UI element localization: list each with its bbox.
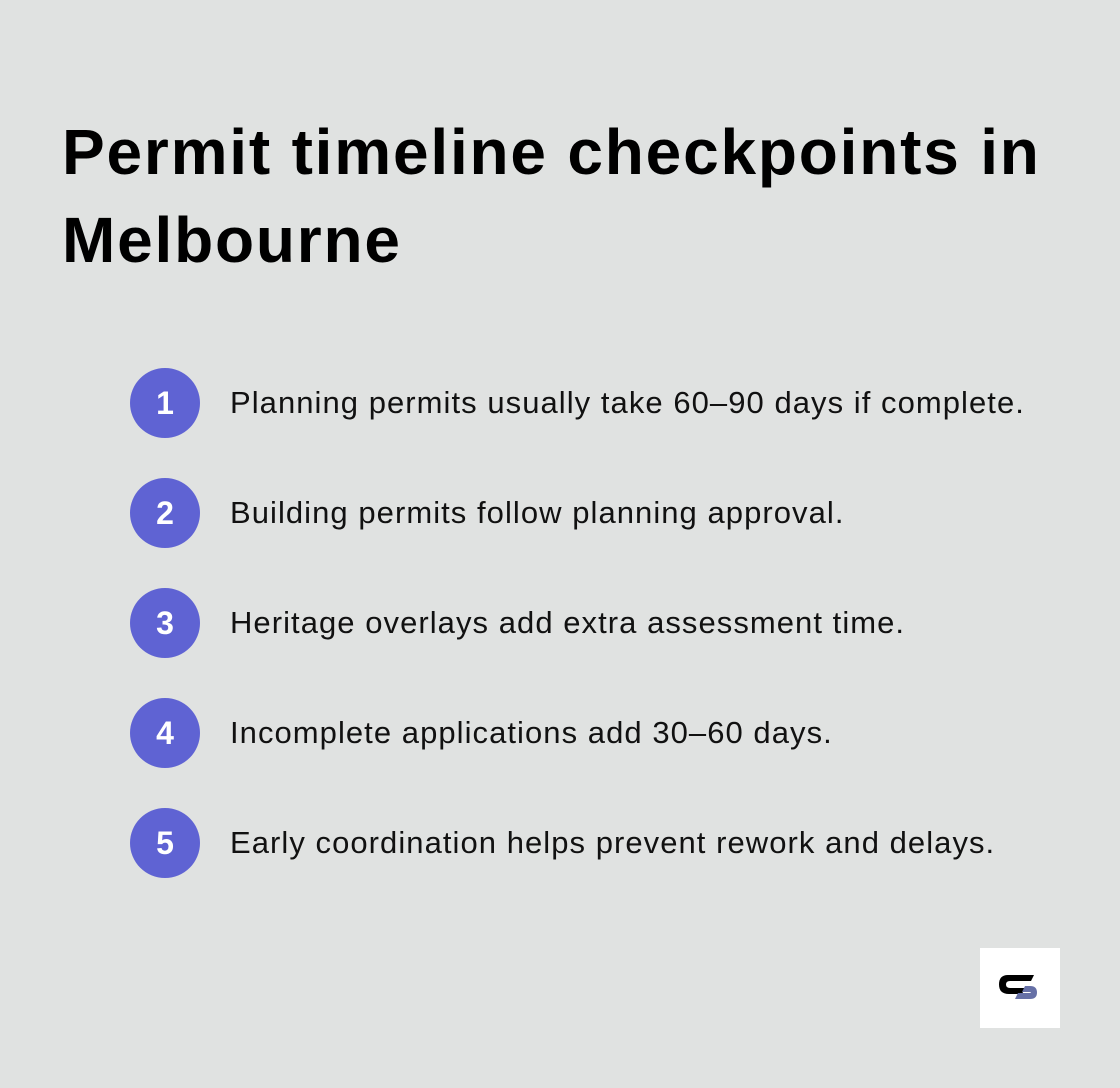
item 3: Heritage overlays add extra assessment time. [230,605,905,640]
title: Melbourne [62,204,402,276]
title [62,116,1041,276]
item 5: 5 [156,825,174,861]
item 5 [130,808,995,878]
item 1: 1 [156,385,174,421]
item 5: Early coordination helps prevent rework and delays. [230,825,995,860]
item 4: Incomplete applications add 30–60 days. [230,715,833,750]
item 2 [130,478,844,548]
item 1: Planning permits usually take 60–90 days if complete. [230,385,1025,420]
item 4 [130,698,833,768]
item 3 [130,588,905,658]
item 1 [130,368,1025,438]
item 2: Building permits follow planning approval. [230,495,844,530]
logo [980,948,1060,1028]
item 2: 2 [156,495,174,531]
item 4: 4 [156,715,174,751]
title: Permit timeline checkpoints in [62,116,1041,188]
item 3: 3 [156,605,174,641]
